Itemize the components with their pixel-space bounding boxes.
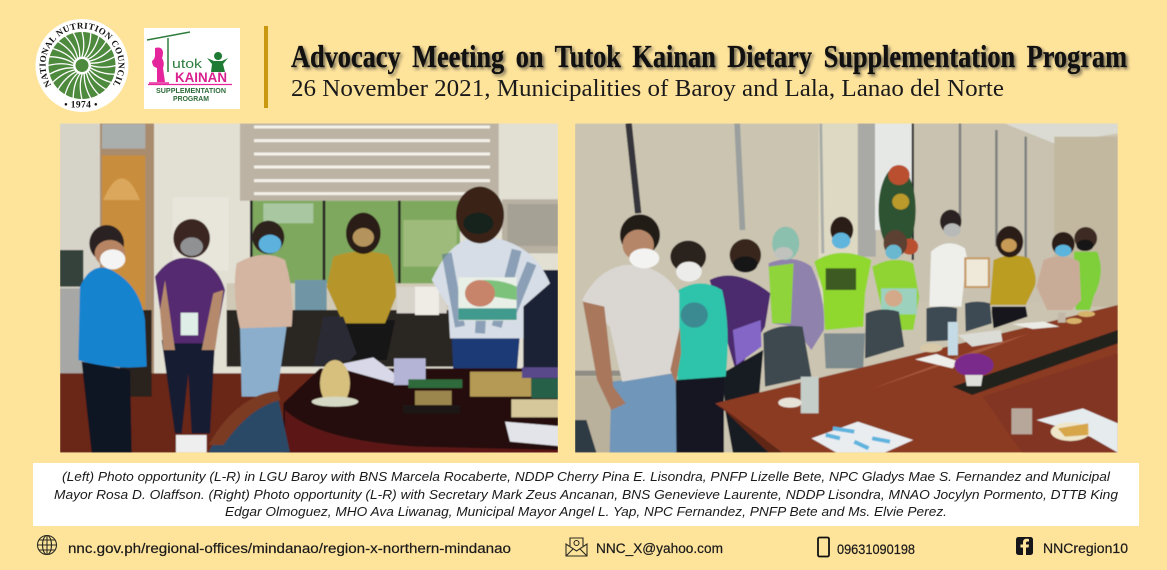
caption box: Mayor Rosa D. Olaffson. (Right) Photo opportunity (L-R) with Secretary Mark Zeus Ancanan, BNS Genevieve Laurente, NDDP Lisondra, MNAO Jocylyn Pormento, DTTB King bbox=[54, 488, 1118, 502]
logo: Tutok Kainan Supplementation Program bbox=[144, 28, 240, 109]
logo: Tutok Kainan Supplementation Program: PROGRAM bbox=[173, 96, 209, 103]
person 2 bbox=[162, 340, 215, 433]
woman purple polo bbox=[710, 276, 770, 373]
footer: website bbox=[38, 536, 511, 556]
footer: website: nnc.gov.ph/regional-offices/mindanao/region-x-northern-mindanao bbox=[68, 541, 511, 556]
person 3 bbox=[240, 327, 287, 397]
icon: globe bbox=[38, 536, 56, 554]
person 4 bbox=[345, 320, 395, 360]
caption box: (Left) Photo opportunity (L-R) in LGU Baroy with BNS Marcela Rocaberte, NDDP Cherry Pina E. Lisondra, PNFP Lizelle Bete, NPC Gladys Mae S. Fernandez and Municipal bbox=[62, 470, 1111, 484]
woman face shield with purple hoodie bbox=[769, 259, 824, 350]
woman teal shirt bbox=[674, 373, 724, 453]
caption box bbox=[33, 463, 1139, 526]
chairs bbox=[763, 326, 811, 387]
person green with booklet bbox=[872, 260, 919, 330]
footer: facebook bbox=[1016, 537, 1128, 556]
person 5 bbox=[451, 338, 520, 370]
icon: envelope bbox=[566, 538, 587, 556]
footer: phone: 09631090198 bbox=[837, 542, 915, 557]
person white barong with certificate bbox=[929, 243, 967, 307]
icon: mobile phone bbox=[818, 538, 829, 556]
man white shirt bbox=[610, 373, 676, 453]
desk bbox=[283, 368, 558, 453]
person yellow bbox=[992, 307, 1027, 328]
footer: phone bbox=[818, 538, 915, 557]
footer: facebook: NNCregion10 bbox=[1043, 541, 1128, 556]
caption box: Edgar Olmoguez, MHO Ava Liwanag, Municipal Mayor Angel L. Yap, NPC Fernandez, PNFP Bete and Ms. Elvie Perez. bbox=[225, 505, 947, 519]
logo: Tutok Kainan Supplementation Program: SUPPLEMENTATION bbox=[156, 88, 226, 95]
icon: facebook bbox=[1016, 537, 1033, 555]
logo: Tutok Kainan Supplementation Program: KAINAN bbox=[175, 69, 227, 85]
person 1 bbox=[82, 362, 132, 453]
chair bbox=[208, 400, 290, 452]
person pink blouse bbox=[1036, 256, 1081, 310]
footer: email: NNC_X@yahoo.com bbox=[596, 541, 723, 556]
logo: Tutok Kainan Supplementation Program: utok bbox=[172, 56, 203, 71]
subtitle: 26 November 2021, Municipalities of Baroy and Lala, Lanao del Norte bbox=[291, 76, 1004, 102]
conference table bbox=[715, 305, 1118, 453]
logo: National Nutrition Council: NATIONAL NUTRITION COUNCIL bbox=[40, 22, 124, 88]
person far right bbox=[1074, 252, 1101, 310]
table items bbox=[801, 377, 819, 413]
title divider bar bbox=[264, 26, 268, 108]
footer: email bbox=[566, 538, 723, 556]
logo: National Nutrition Council: • 1974 • bbox=[64, 100, 98, 110]
man green shirt bbox=[824, 333, 865, 368]
photo: left, LGU Baroy office bbox=[60, 123, 558, 453]
photo: right, conference room bbox=[575, 123, 1118, 453]
